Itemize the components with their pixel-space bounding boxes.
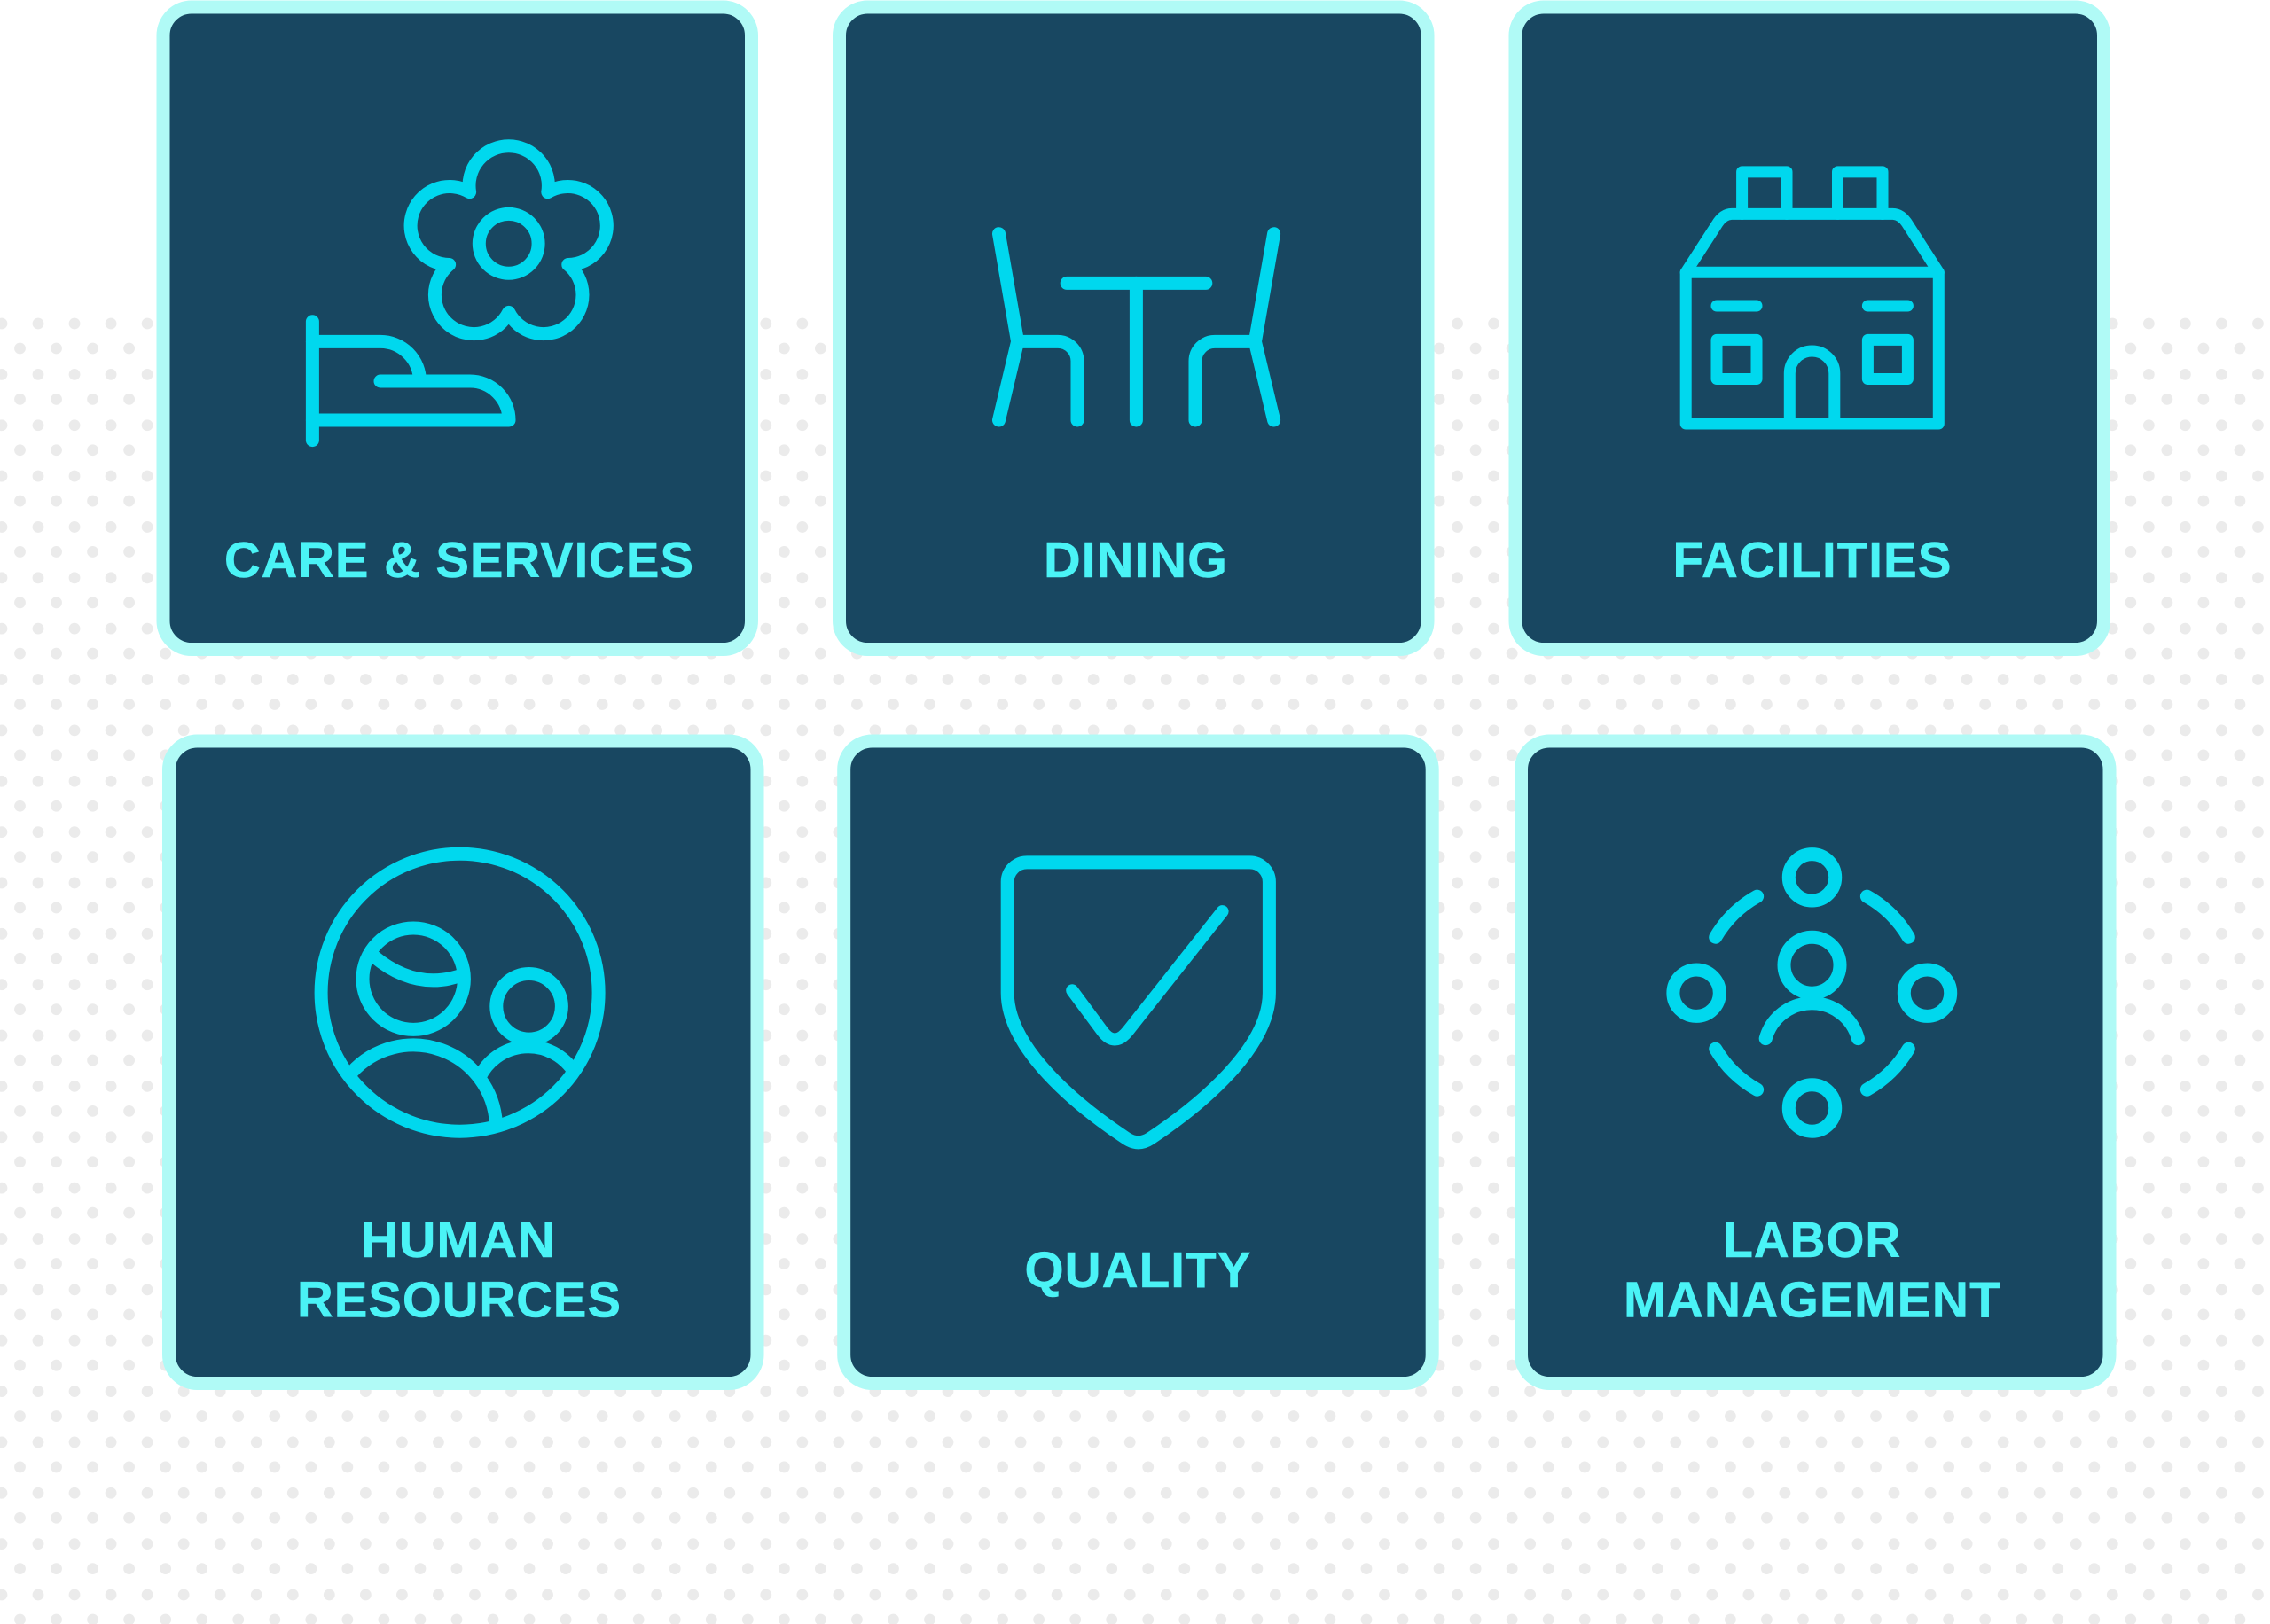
label: care & services: CARE & SERVICES: [224, 532, 694, 588]
label: labor management: [1624, 1212, 2001, 1328]
label: human resources: RESOURCES: [297, 1272, 622, 1328]
panel: dining: [839, 7, 1428, 649]
card background: [844, 741, 1432, 1383]
label: labor management: MANAGEMENT: [1624, 1272, 2001, 1328]
panel: labor management: [1522, 741, 2110, 1383]
panel: facilities: [1515, 7, 2103, 649]
label: labor management: LABOR: [1723, 1212, 1901, 1268]
card background: [163, 7, 752, 649]
icon: hand holding flower: [312, 146, 607, 441]
label: dining: DINING: [1044, 532, 1228, 588]
card background: [168, 741, 757, 1383]
label: quality: QUALITY: [1025, 1242, 1252, 1298]
panel: care & services: [163, 7, 752, 649]
panel: human resources: [168, 741, 757, 1383]
icon: team around leader: [1673, 855, 1951, 1131]
card background: [839, 7, 1428, 649]
icon: shield with check: [1007, 863, 1269, 1143]
label: human resources: [297, 1212, 622, 1328]
label: human resources: HUMAN: [361, 1212, 556, 1268]
icon: people in circle: [321, 854, 599, 1131]
panel: quality: [844, 741, 1432, 1383]
icon: building: [1686, 172, 1938, 424]
card background: [1515, 7, 2103, 649]
label: facilities: FACILITIES: [1672, 532, 1953, 588]
card background: [1522, 741, 2110, 1383]
icon: table and chairs: [998, 234, 1274, 420]
